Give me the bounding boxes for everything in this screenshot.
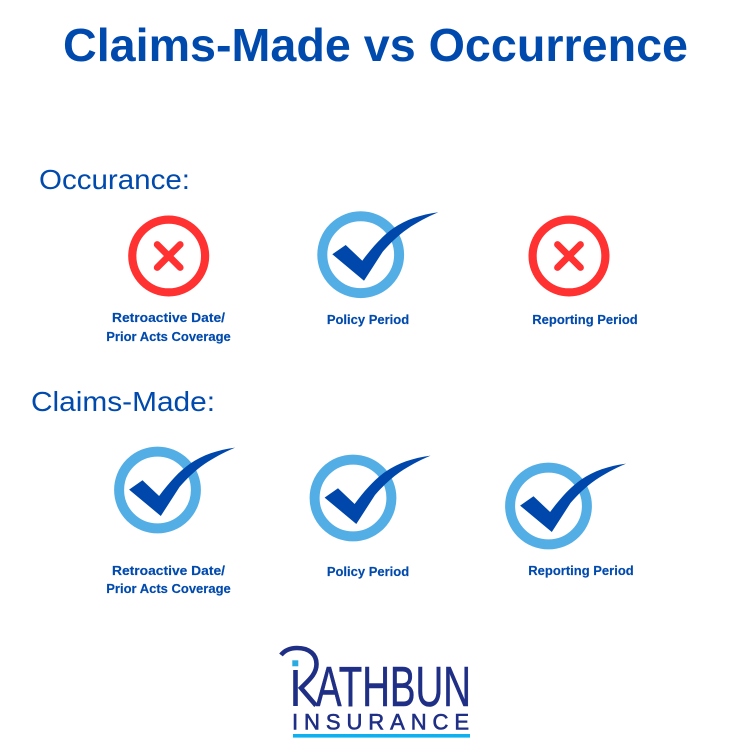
label: reporting period: Reporting Period [532, 312, 638, 327]
panel: claims-made row [106, 448, 634, 596]
logo R mark [281, 648, 316, 706]
logo dot [292, 660, 298, 666]
heading: occurrence: Occurance: [39, 164, 190, 195]
icon: check reporting period [510, 464, 626, 544]
logo: Rathbun Insurance [281, 648, 471, 738]
logo underline [293, 734, 470, 738]
label: retroactive date: Retroactive Date/ [112, 563, 225, 578]
icon: check retroactive date [119, 448, 235, 528]
icon: check policy period [315, 456, 431, 536]
label: retroactive date: Retroactive Date/ [112, 310, 225, 325]
label: reporting period: Reporting Period [528, 563, 634, 578]
panel: occurrence row [106, 212, 638, 344]
logo subtitle: INSURANCE [292, 710, 469, 734]
label: retroactive date: Prior Acts Coverage [106, 329, 231, 344]
label: policy period: Policy Period [327, 564, 409, 579]
title: Claims-Made vs Occurrence [63, 19, 688, 71]
logo wordmark: ATHBUN [316, 655, 471, 719]
label: retroactive date: Prior Acts Coverage [106, 581, 231, 596]
icon: red cross retroactive date [132, 220, 205, 292]
label: policy period: Policy Period [327, 312, 409, 327]
heading: claims-made: Claims-Made: [31, 386, 215, 417]
icon: red cross reporting period [533, 220, 605, 292]
icon: check policy period [322, 212, 438, 293]
